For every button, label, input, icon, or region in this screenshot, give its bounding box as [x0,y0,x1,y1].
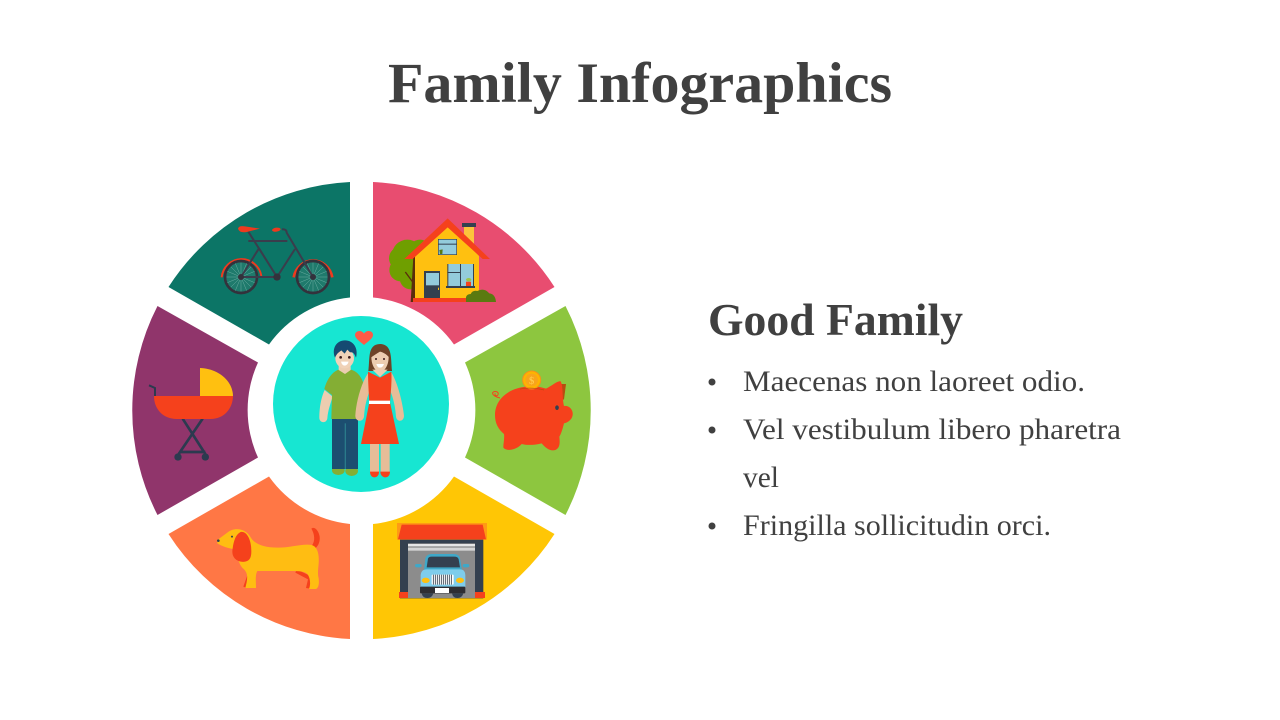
donut diagram [132,182,591,639]
icon: dog [217,528,320,589]
segment: house (pink) [373,182,554,344]
icon: piggy bank: $ [529,376,535,387]
segment: pram (purple) [132,306,258,515]
icon: house [389,218,496,302]
segment: dog (orange) [168,476,350,639]
title: Family Infographics [388,52,892,115]
bullet list [708,365,1121,542]
segment: piggy bank (green) [465,306,591,515]
center circle [273,316,449,492]
bullet list: Maecenas non laoreet odio. [743,365,1085,398]
man [319,340,364,476]
bullet list: Fringilla sollicitudin orci. [743,509,1051,542]
heading: Good Family [708,294,963,345]
segment: bicycle (teal) [168,182,350,344]
heart [355,331,373,345]
icon: piggy bank [493,371,573,450]
text block: good family [708,294,1121,542]
icon: garage with car [397,523,487,598]
icon: couple [319,331,404,477]
icon: bicycle [222,226,332,293]
segment: garage (yellow) [373,476,554,639]
bullet list: Vel vestibulum libero pharetra [743,413,1121,446]
icon: pram [149,368,233,461]
center circle with couple [273,316,449,492]
woman [355,344,404,477]
bullet list: vel [743,461,779,494]
